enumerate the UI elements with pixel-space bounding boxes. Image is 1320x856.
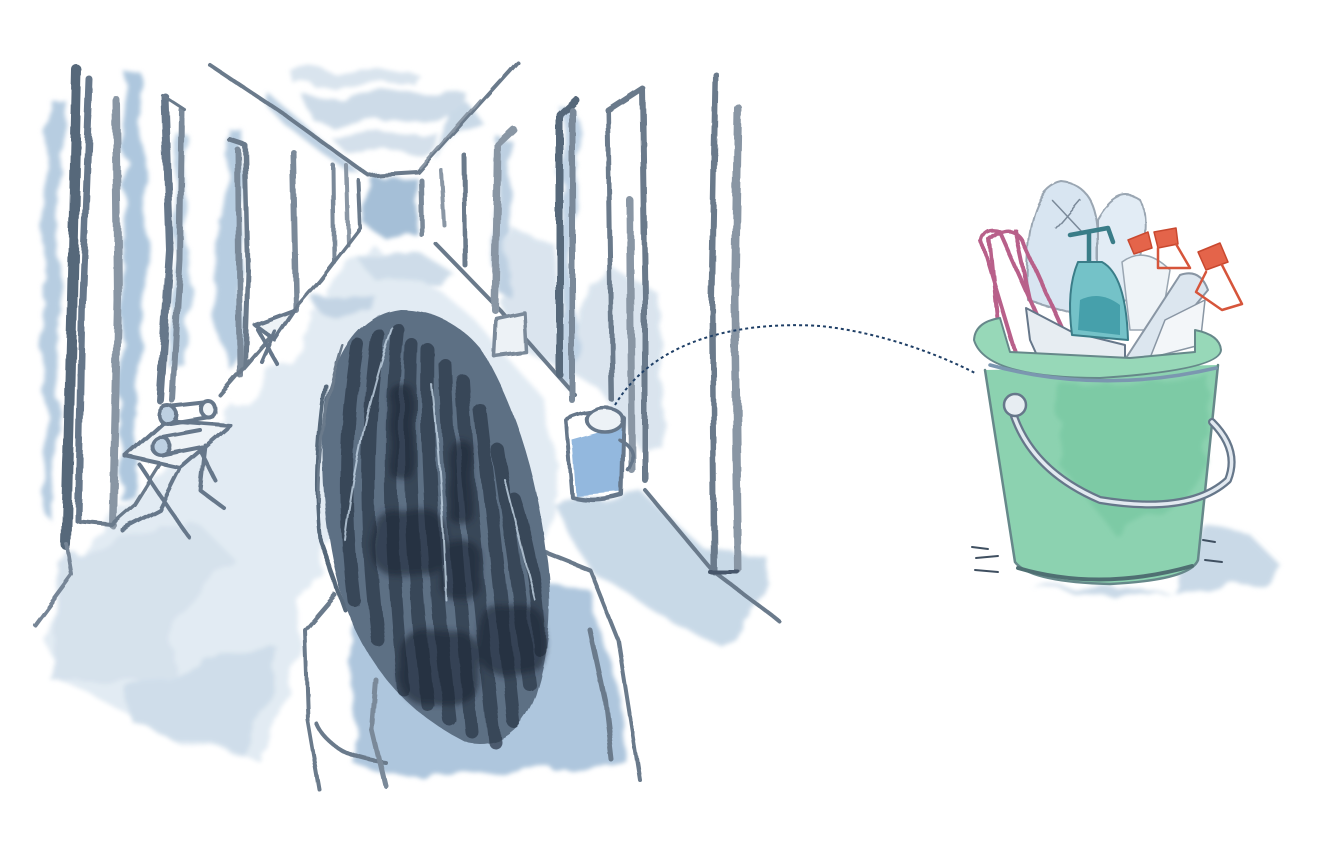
folding table with rolls bbox=[122, 401, 230, 538]
illustration: green bucket with cleaning supplies bbox=[972, 182, 1280, 598]
small bucket in corridor bbox=[566, 408, 632, 500]
teal soap pump bottle bbox=[1070, 228, 1128, 340]
small doorstop item bbox=[494, 312, 526, 356]
white spray bottles with red caps bbox=[1122, 228, 1242, 360]
bucket shadow bbox=[1030, 525, 1280, 598]
corridor wall lines bbox=[35, 62, 778, 625]
illustration: corridor scene bbox=[35, 62, 975, 790]
person body bbox=[305, 552, 640, 790]
rag in bucket bbox=[1026, 308, 1125, 362]
dotted connector line bbox=[615, 325, 975, 405]
motion marks bbox=[972, 540, 1222, 572]
pink rubber gloves handle bbox=[982, 230, 1065, 352]
person hair bbox=[317, 309, 550, 743]
bucket body bbox=[974, 318, 1221, 584]
ceiling wash bbox=[265, 70, 485, 238]
corridor floor wash bbox=[45, 225, 770, 760]
bucket handle bbox=[1004, 394, 1232, 504]
mitts bbox=[1027, 182, 1144, 320]
folding stool near wall bbox=[255, 310, 295, 365]
wall washes bbox=[42, 72, 574, 525]
